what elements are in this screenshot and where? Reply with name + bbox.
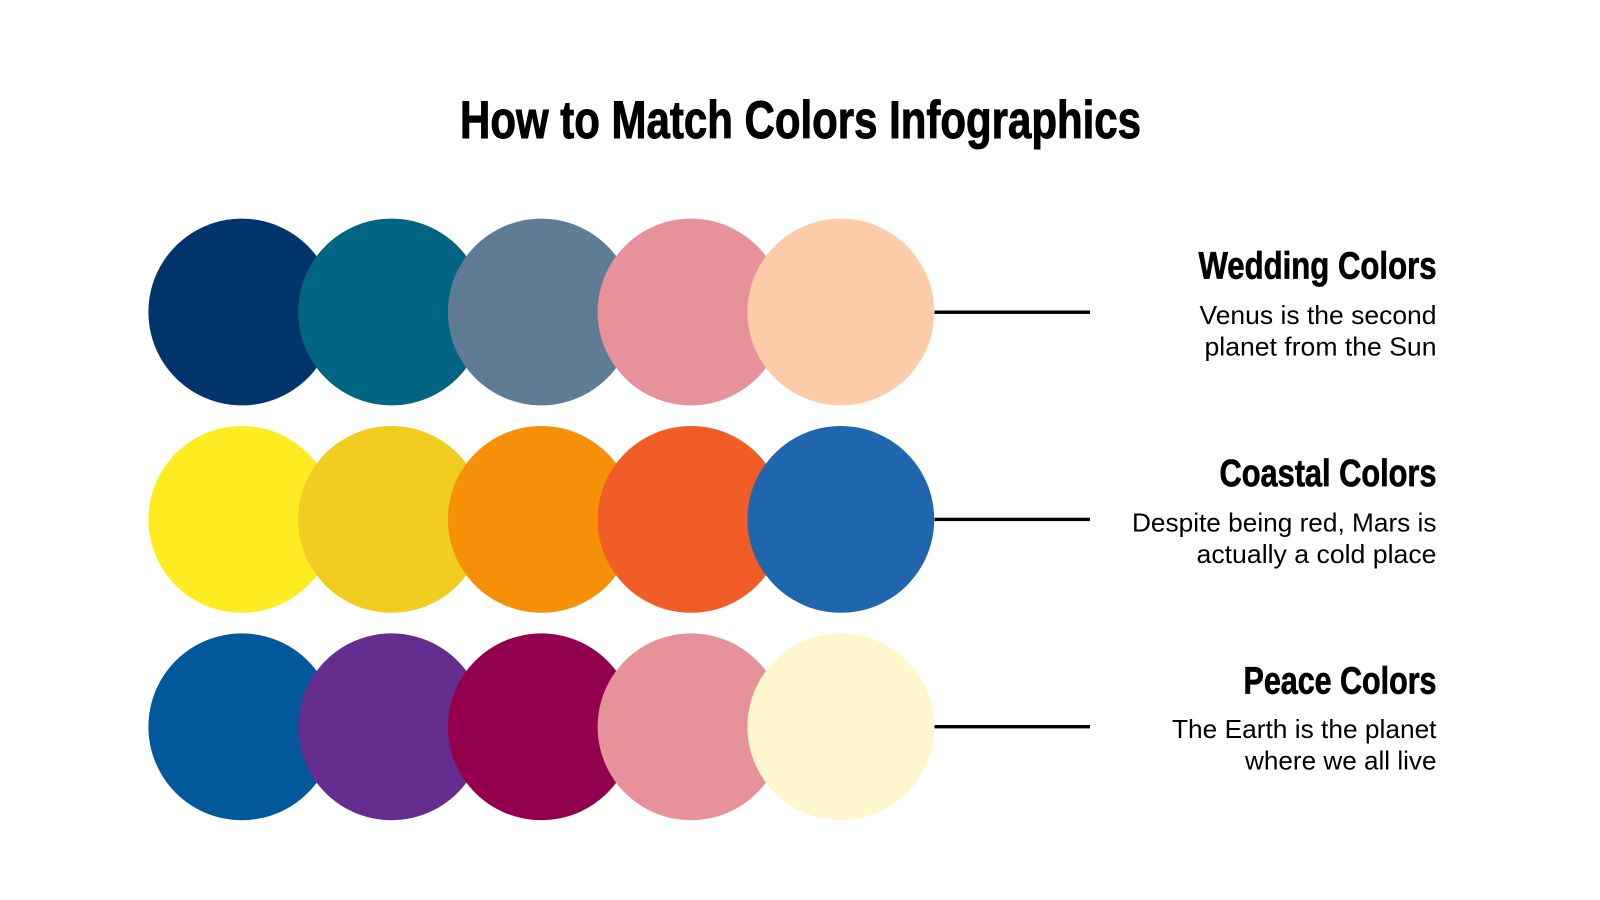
- text block: wedding description: planet from the Sun: [1204, 332, 1436, 362]
- text block: wedding description: Venus is the second: [1200, 300, 1436, 330]
- text block: coastal description: [1132, 507, 1436, 569]
- panel: peace colors row: [148, 633, 1437, 820]
- text block: peace description: [1172, 714, 1437, 776]
- text block: peace description: The Earth is the planet: [1172, 714, 1437, 744]
- connector line: wedding: [934, 310, 1090, 314]
- text block: peace description: where we all live: [1244, 746, 1436, 776]
- heading: wedding colors: Wedding Colors: [1198, 246, 1436, 288]
- text block: coastal description: actually a cold place: [1196, 539, 1436, 569]
- connector line: peace: [934, 725, 1090, 728]
- heading: peace colors: Peace Colors: [1244, 660, 1436, 702]
- text block: coastal description: Despite being red, Mars is: [1132, 507, 1436, 537]
- heading: coastal colors: Coastal Colors: [1220, 453, 1436, 495]
- title: How to Match Colors Infographics: [460, 91, 1141, 150]
- color swatches: peace: [148, 633, 934, 820]
- connector line: coastal: [934, 518, 1090, 521]
- panel: wedding colors row: [148, 219, 1436, 405]
- text block: wedding description: [1200, 300, 1436, 362]
- color swatches: coastal: [148, 426, 934, 613]
- color swatches: wedding: [148, 219, 934, 405]
- panel: coastal colors row: [148, 426, 1436, 613]
